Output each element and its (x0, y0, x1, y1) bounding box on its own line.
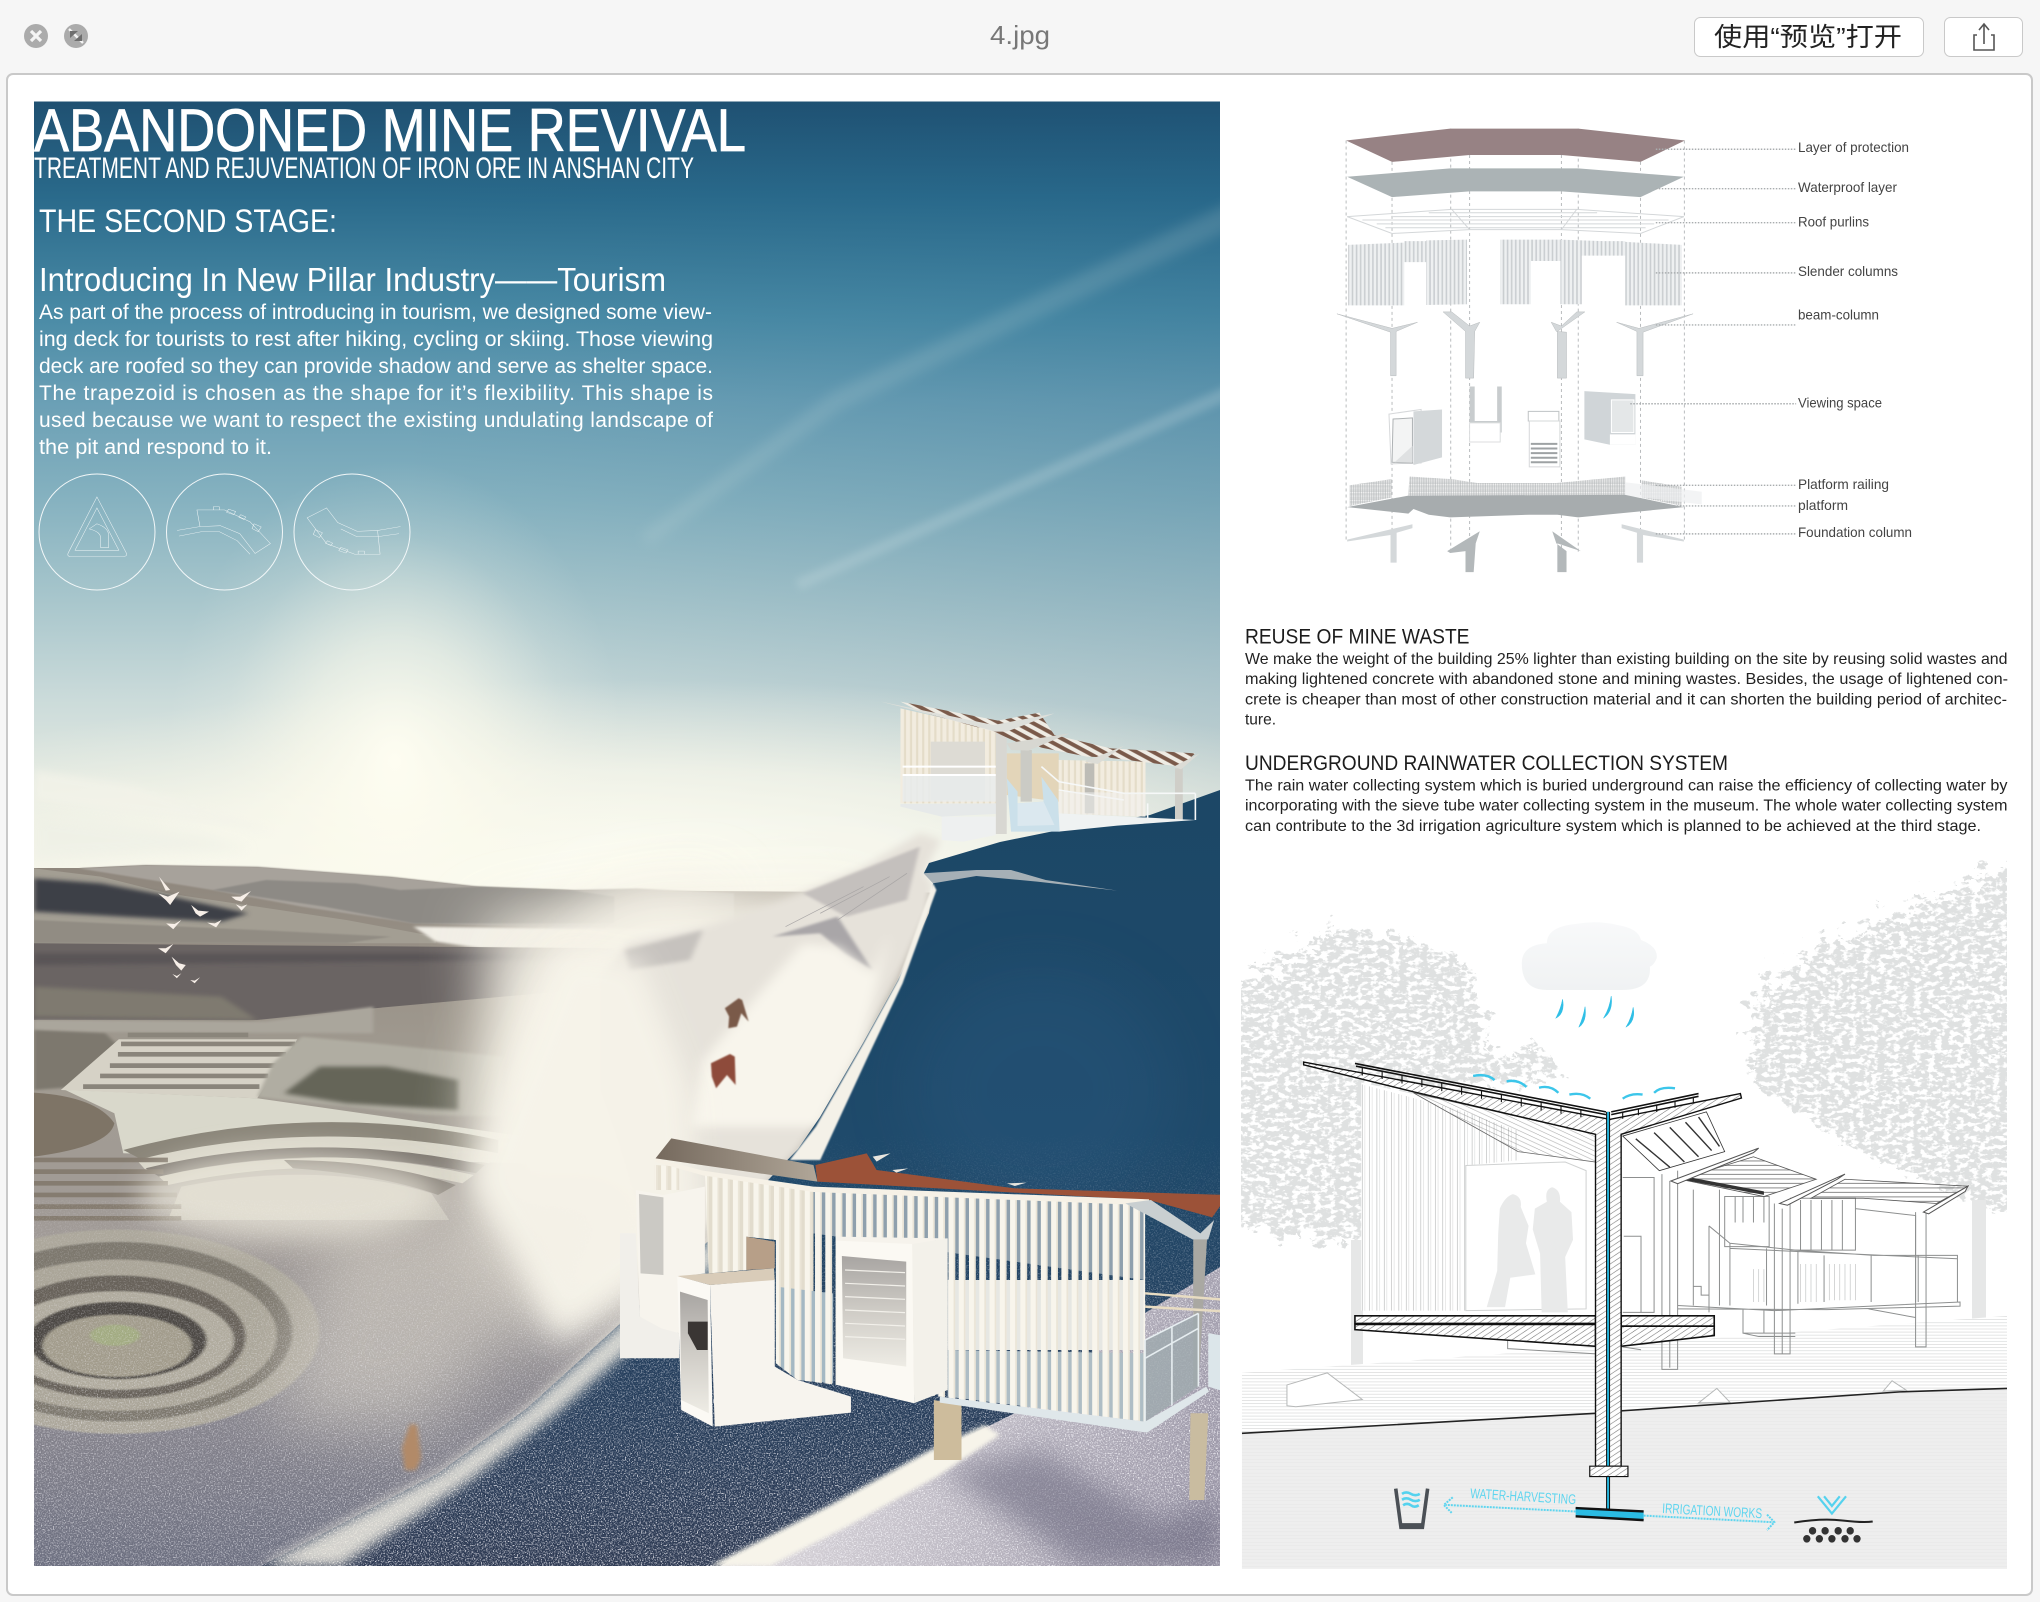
layer of protection (1346, 129, 1685, 162)
small viewing deck building on cliff (881, 702, 1200, 842)
label: water harvesting: WATER-HARVESTING (1470, 1485, 1577, 1507)
body text: rainwater (1245, 778, 2008, 835)
bright lake (413, 925, 592, 948)
glass icon (1396, 1489, 1428, 1527)
axonometric labels: Viewing space (1798, 394, 1882, 410)
file name: 4.jpg (990, 20, 1050, 50)
skiers (402, 998, 749, 1470)
rocks (1287, 1373, 1906, 1407)
heading: second stage: THE SECOND STAGE: (39, 203, 337, 239)
tree trunks (1351, 1200, 1986, 1370)
body text: reuse: We make the weight of the building 25% lighter than existing building on the site by reusing solid wastes and (1245, 651, 2008, 668)
roof purlins (1347, 209, 1684, 233)
body text: rainwater: The rain water collecting system which is buried underground can raise the efficiency of collecting water by (1245, 778, 2008, 794)
ground line (1242, 1388, 2008, 1433)
mesh railing infill (1753, 1264, 1855, 1302)
window title bar (24, 18, 2022, 56)
distant hills (79, 865, 734, 933)
centre box (710, 1279, 851, 1427)
axonometric labels: Foundation column (1798, 524, 1912, 540)
beam-columns (1337, 312, 1693, 378)
red roof (815, 1153, 1228, 1217)
axonometric labels: Roof purlins (1798, 214, 1869, 230)
body text: tourism (39, 301, 713, 459)
panel: exploded axonometric diagram (1337, 129, 1796, 572)
back wall slats and room (1361, 1082, 1596, 1311)
body text: tourism: As part of the process of introducing in tourism, we designed some view- (39, 301, 712, 324)
door opening (746, 1237, 775, 1270)
cliff wall (34, 943, 614, 1020)
body text: rainwater: incorporating with the sieve tube water collecting system in the museum. The whole water collecting system (1245, 798, 2008, 814)
mist cloud from ski slope (34, 880, 880, 1570)
roof stripes (1623, 1112, 1968, 1214)
icon: irrigation soil (1794, 1496, 1873, 1543)
cloud and rain (1522, 922, 1657, 1027)
spiral pit rings (34, 1230, 318, 1434)
roof rails and purlins (1355, 1063, 1699, 1119)
stepped terraces (61, 1039, 297, 1098)
platform railing (1350, 476, 1682, 506)
body text: tourism: ing deck for tourists to rest after hiking, cycling or skiing. Those viewing (39, 328, 713, 351)
waterproof layer (1347, 168, 1684, 197)
columns (934, 1400, 962, 1460)
arrow: water harvesting (1444, 1497, 1576, 1513)
button: share (1944, 18, 2022, 56)
amphitheatre arcs (124, 1122, 494, 1158)
left boxes (620, 1233, 679, 1358)
birds (158, 877, 251, 983)
people silhouettes (1487, 1187, 1573, 1312)
deck soffit (940, 1387, 1209, 1433)
icon: mirrored plan diagram circle (294, 474, 410, 590)
subtitle: TREATMENT AND REJUVENATION OF IRON ORE IN ANSHAN CITY (34, 152, 694, 185)
axonometric labels: Waterproof layer (1798, 179, 1897, 195)
body text: tourism: The trapezoid is chosen as the shape for it’s flexibility. This shape is (39, 382, 713, 405)
body text: reuse: crete is cheaper than most of other construction material and it can shorten the building period of architec- (1245, 692, 2007, 708)
taupe roof (656, 1138, 817, 1182)
axonometric labels: beam-column (1798, 306, 1879, 322)
body text: reuse (1245, 651, 2008, 728)
big window box (912, 1238, 948, 1403)
bushes (257, 1037, 503, 1117)
icon: close button (24, 24, 48, 48)
distant land and terraces (34, 865, 1000, 1566)
slender columns (1348, 240, 1682, 305)
Y-column and roof section (1304, 1062, 1741, 1466)
terrace lawn and rock (65, 1090, 525, 1163)
sky (34, 102, 1220, 889)
rain splashes on roof (1473, 1075, 1675, 1099)
heading: rainwater system: UNDERGROUND RAINWATER COLLECTION SYSTEM (1245, 752, 1728, 775)
body text: tourism: deck are roofed so they can provide shadow and serve as shelter space. (39, 355, 713, 378)
left slope (34, 1030, 119, 1090)
right pavilion linework (1508, 1171, 1960, 1369)
background trees (1230, 850, 2030, 1245)
heading: tourism: Introducing In New Pillar Industry——Tourism (39, 261, 666, 298)
arrow: irrigation (1644, 1515, 1774, 1530)
panel: poster rendering (34, 102, 1220, 1566)
body text: reuse: ture. (1245, 712, 1276, 728)
axonometric labels (1798, 139, 1912, 540)
floor slab section (1355, 1316, 1714, 1346)
icon: disabled zoom button (64, 24, 88, 48)
body text: tourism: the pit and respond to it. (39, 436, 272, 459)
button: open with preview: 使用“预览”打开 (1714, 22, 1902, 52)
panel: rainwater section drawing (1230, 850, 2030, 1569)
platform slab (1347, 495, 1684, 517)
axonometric labels: platform (1798, 497, 1848, 513)
snow slope (470, 833, 941, 1340)
axonometric labels: Slender columns (1798, 263, 1898, 279)
underground fill (1242, 1388, 2008, 1569)
body text: tourism: used because we want to respect the existing undulating landscape of (39, 409, 713, 432)
dark foreground hill (34, 868, 436, 943)
icon: road sign circle (39, 474, 155, 590)
slat backing (658, 1165, 680, 1190)
axonometric labels: Layer of protection (1798, 139, 1909, 155)
ground hatch (1242, 1316, 2008, 1433)
axonometric labels: Platform railing (1798, 476, 1889, 492)
leader lines (1630, 149, 1796, 534)
viewing space boxes (1389, 387, 1635, 467)
right structure (1193, 1238, 1207, 1387)
main museum building foreground (620, 1138, 1230, 1500)
dark hillside (261, 790, 1220, 1566)
vertical slats (705, 1173, 1145, 1422)
body text: rainwater: can contribute to the 3d irrigation agriculture system which is planned to be achieved at the third stage. (1245, 818, 1981, 835)
title: ABANDONED MINE REVIVAL (34, 97, 746, 164)
water pipe (1606, 1112, 1610, 1509)
left band stripes (34, 1160, 181, 1218)
snow bank, bottom right (700, 1260, 1220, 1570)
roof fascia (656, 1158, 1149, 1205)
label: irrigation works: IRRIGATION WORKS (1662, 1500, 1763, 1521)
heading: reuse of mine waste: REUSE OF MINE WASTE (1245, 626, 1470, 648)
body text: reuse: making lightened concrete with abandoned stone and mining wastes. Besides, the usage of lightened con- (1245, 671, 2008, 688)
footing (1590, 1466, 1628, 1477)
button: open with preview (1694, 18, 1924, 56)
icon: plan diagram circle (166, 474, 282, 590)
storage pipe (1576, 1508, 1644, 1520)
foundation columns (1347, 524, 1684, 572)
